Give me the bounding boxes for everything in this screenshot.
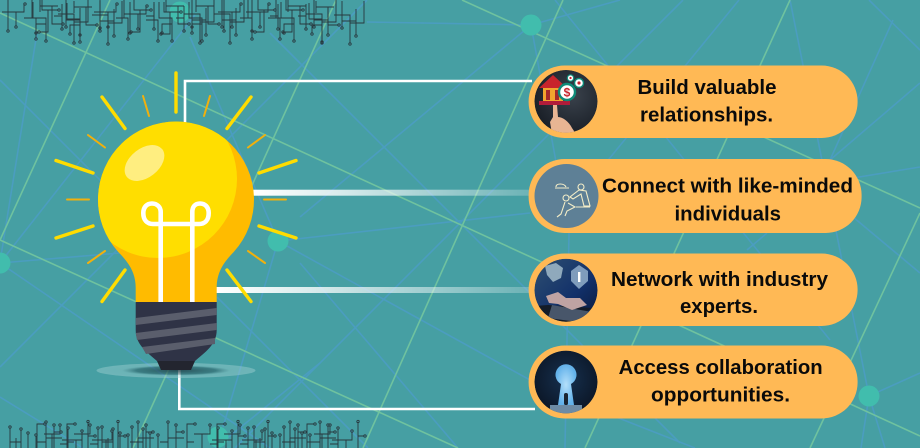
item 1: build valuable relationships	[529, 66, 858, 138]
connector: bulb to second pill	[250, 190, 532, 196]
label 1: relationships.	[640, 105, 773, 127]
icon: house on finger: $	[564, 86, 571, 100]
label 2: individuals	[674, 204, 781, 226]
connector: bulb to third pill	[214, 287, 532, 293]
icon: house on finger	[534, 70, 598, 134]
pill 1	[529, 66, 858, 138]
circuit pattern: top	[2, 0, 364, 45]
connector: bulb top to first pill	[185, 81, 532, 124]
label 3: Network with industry	[611, 269, 829, 291]
icon: helping hand climbers	[534, 164, 598, 228]
glass yellow front	[98, 122, 237, 258]
label 3: experts.	[680, 296, 758, 318]
base cap	[157, 361, 195, 370]
label 4: opportunities.	[651, 385, 790, 407]
glass body	[98, 122, 254, 302]
item 2: connect with like-minded individuals	[529, 159, 862, 233]
icon: keyhole with silhouette	[534, 351, 598, 414]
light bulb	[96, 122, 256, 378]
item 3: network with industry experts	[529, 254, 858, 326]
light rays: long	[56, 73, 296, 302]
glass highlight	[118, 138, 171, 188]
item 4: access collaboration opportunities	[529, 346, 858, 418]
screw base	[136, 302, 217, 361]
bulb shadow	[96, 363, 256, 378]
connector: bulb base to fourth pill	[179, 368, 535, 409]
filament	[143, 204, 209, 302]
circuit pattern: bottom	[9, 420, 366, 448]
pill 3	[529, 254, 858, 326]
label 1: Build valuable	[638, 77, 776, 99]
light rays: short	[67, 96, 286, 263]
pill 4	[529, 346, 858, 418]
label 2: Connect with like-minded	[602, 176, 853, 198]
icon: hands on laptop with shield	[534, 259, 598, 324]
screw threads	[136, 308, 217, 354]
label 4: Access collaboration	[619, 357, 823, 379]
pill 2	[529, 159, 862, 233]
